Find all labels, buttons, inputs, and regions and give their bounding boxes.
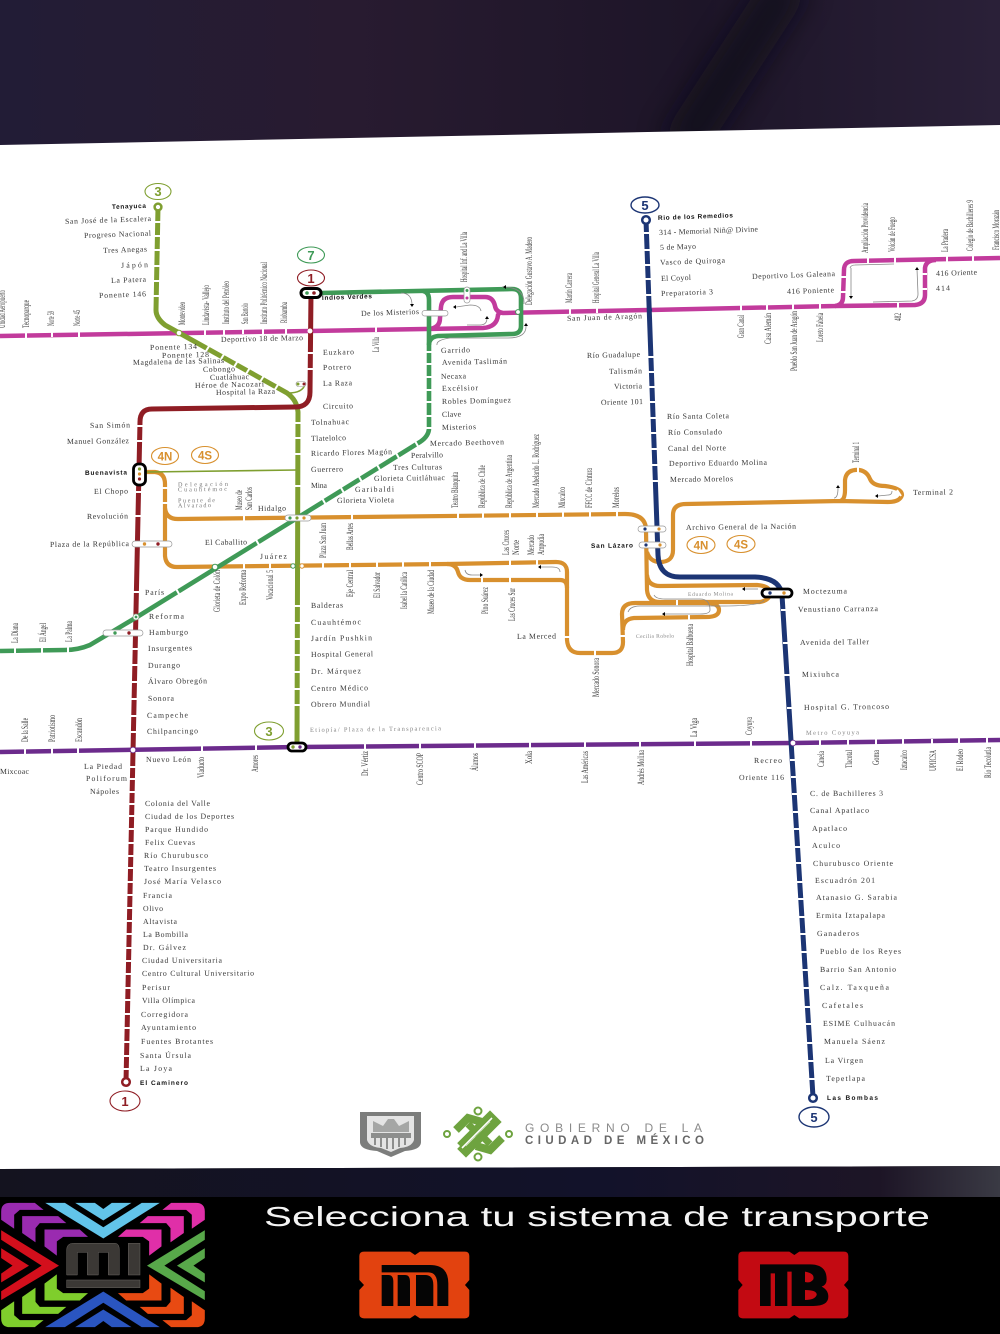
labels: line 1 north and line 3 center: Ricardo Flores Magón — [311, 447, 392, 458]
labels: line 1 north and line 3 center: Cuauhtémoc — [311, 617, 362, 627]
labels: line 1 north and line 3 center: Tlatelolco — [311, 433, 346, 443]
labels: vertical stations top: Pueblo San Juan de Aragón — [789, 311, 799, 371]
labels: line 1 north and line 3 center: Balderas — [311, 601, 343, 610]
badge: 4N right — [687, 536, 715, 554]
labels: line 4 horizontal: El Caballito — [205, 537, 247, 547]
line: red line 1 — [122, 293, 314, 1082]
labels: vertical stations line 4: Mercado — [526, 535, 536, 555]
labels: line 7: Glorieta Violeta — [337, 495, 395, 505]
labels: line 1 north and line 3 center: Tolnahuac — [311, 417, 350, 427]
labels: line 4 horizontal: Delegación — [178, 481, 228, 488]
labels: vertical stations top: Hospital Inf. and La Villa — [459, 232, 469, 282]
chevrons: orange bottom-right — [117, 1273, 205, 1328]
labels: line 1 north and line 3 center: Hospital General — [311, 649, 374, 659]
band: dark strip below map — [0, 1166, 1000, 1197]
labels: vertical stations line 4: Mercado Abelardo L. Rodríguez — [531, 434, 541, 508]
labels: line 5: Cafetales — [822, 1001, 863, 1010]
line: olive line 3 — [147, 207, 305, 747]
labels: vertical stations lines 7 and 2: La Diana — [10, 623, 20, 643]
labels: line 5: Avenida del Taller — [800, 637, 869, 647]
labels: vertical stations line 4: República de Chile — [477, 465, 487, 508]
labels: line 1 south: Río Churubusco — [144, 851, 208, 860]
labels: line 5: Barrio San Antonio — [820, 965, 896, 974]
panel: white map sheet — [0, 125, 1000, 1169]
labels: vertical stations lines 7 and 2: El Ángel — [38, 623, 48, 642]
labels: vertical stations line 4: Las Cruces — [501, 530, 511, 555]
labels: line 5: Rio de los Remedios — [658, 212, 733, 222]
line: purple line 2 — [0, 737, 1000, 755]
chevrons: blue bottom — [43, 1291, 162, 1328]
labels: line 5: Apatlaco — [812, 824, 847, 833]
labels: line 5: Río Guadalupe — [587, 350, 641, 360]
labels: vertical stations line 4: Hospital Balbuena — [685, 624, 695, 666]
interchange pills — [103, 287, 796, 753]
labels: vertical stations line 4: FFCC de Cintura — [584, 468, 594, 508]
labels: line 1 south: La Bombilla — [143, 930, 189, 939]
labels: line 6 horizontal: 416 Poniente — [787, 285, 835, 296]
labels: line 5: C. de Bachilleres 3 — [810, 789, 883, 798]
labels: line 4 horizontal: Alvarado — [178, 502, 211, 509]
labels: vertical stations lines 7 and 2: Andrés Molina — [636, 750, 646, 785]
labels: line 5: Oriente 116 — [739, 773, 784, 782]
labels: vertical stations top: La Pradera — [940, 229, 950, 252]
labels: vertical stations lines 7 and 2: Canela — [816, 751, 826, 767]
labels: line 1 center: Durango — [148, 661, 180, 670]
labels: vertical stations lines 7 and 2: Álamos — [470, 753, 480, 771]
icon: Ciudad de México green knot — [444, 1108, 512, 1160]
labels: vertical stations line 4: Mixcalco — [557, 487, 567, 508]
labels: line 3 north: Tenayuca — [112, 203, 146, 211]
labels: line 5: Oriente 101 — [601, 397, 643, 407]
labels: vertical stations top — [0, 200, 1000, 371]
badge: line 5 top — [631, 197, 659, 213]
labels: line 3 north: Ponente 146 — [99, 289, 146, 300]
line number badges — [110, 184, 829, 1127]
labels: vertical stations line 4: República de Argentina — [504, 455, 514, 508]
labels: line 4 horizontal: Juárez — [260, 552, 288, 561]
labels: vertical stations top: Volcán de Fuego — [887, 217, 897, 252]
labels: line 4 horizontal — [0, 481, 796, 776]
labels: line 3 north: Cobongo — [203, 364, 235, 374]
labels: line 1 north and line 3 center: Indios Verdes — [322, 293, 372, 302]
labels: line 5: Ganaderos — [817, 929, 859, 938]
labels: vertical stations top: Norte 45 — [72, 310, 82, 326]
labels: line 4 horizontal: Cuauhtémoc — [178, 486, 227, 493]
labels: line 5: Canal Apatlaco — [810, 806, 869, 815]
labels: vertical stations lines 7 and 2: UPIICSA — [928, 750, 938, 771]
labels: vertical stations lines 7 and 2: Xola — [524, 751, 534, 764]
labels: vertical stations line 4: Teatro Blanquita — [450, 472, 460, 508]
labels: line 4 horizontal: Mixcoac — [0, 767, 30, 776]
labels: line 5: Victoria — [614, 381, 643, 391]
labels: vertical stations lines 7 and 2: Escandón — [74, 718, 84, 742]
badge: line 3 bottom: 3 — [265, 724, 273, 739]
labels: line 1 north and line 3 center: Centro Médico — [311, 683, 368, 693]
labels: line 4 horizontal: La Merced — [517, 632, 556, 641]
line: orange lines 4N and 4S — [145, 467, 902, 656]
labels: line 5: Preparatoria 3 — [661, 287, 713, 298]
labels: line 1 south: Teatro Insurgentes — [144, 864, 216, 873]
labels: line 3 north: Tres Anegas — [103, 244, 147, 255]
labels: line 6 horizontal: 416 Oriente — [936, 268, 978, 278]
labels: line 4 horizontal: Eduardo Molina — [688, 591, 734, 598]
labels: line 4 horizontal: Hidalgo — [258, 504, 286, 513]
labels: vertical stations line 4: Norte — [511, 540, 521, 555]
badge: line 5 bottom: 5 — [810, 1110, 818, 1125]
labels: line 3 north — [65, 203, 276, 397]
labels: line 5: Mercado Morelos — [670, 474, 733, 484]
badge: line 3 top — [145, 184, 171, 200]
labels: line 3 north: Progreso Nacional — [84, 229, 152, 240]
labels: line 3 north: San José de la Escalera — [65, 214, 152, 226]
badge: line 3 top: 3 — [154, 184, 162, 199]
labels: vertical stations top: 482 — [893, 313, 903, 321]
labels: line 1 south: Francia — [143, 891, 173, 900]
labels: line 1 south: La Joya — [140, 1064, 173, 1073]
labels: line 4 horizontal: Cecilia Robelo — [636, 634, 674, 640]
labels: vertical stations line 4: Museo de — [234, 490, 244, 510]
labels: line 5: Manuela Sáenz — [824, 1037, 886, 1046]
labels: line 7: Necaxa — [441, 371, 467, 381]
labels: vertical stations line 4: Terminal 1 — [851, 442, 861, 463]
labels: line 1 north and line 3 center: Mina — [311, 481, 328, 490]
labels: vertical stations lines 7 and 2: Las Américas — [580, 751, 590, 783]
labels: line 6 horizontal: Terminal 2 — [913, 488, 953, 497]
labels: line 3 north: Magdalena de las Salinas — [133, 356, 224, 367]
labels: vertical stations line 4: Bellas Artes — [345, 523, 355, 550]
labels: line 6 horizontal: 414 — [936, 284, 950, 293]
labels: line 1 center: París — [145, 588, 164, 597]
labels: line 1 south: Dr. Gálvez — [143, 943, 187, 952]
labels: line 5: Churubusco Oriente — [813, 859, 894, 868]
labels: line 7: Avenida Taslimán — [442, 357, 507, 367]
labels: vertical stations line 4: Eje Central — [345, 570, 355, 597]
labels: line 5: Escuadrón 201 — [815, 876, 875, 885]
badge: 4N right: 4N — [694, 540, 708, 552]
direction arrows — [401, 264, 919, 616]
labels: vertical stations lines 7 and 2: Río Tecolutla — [983, 747, 993, 778]
badge: line 7 — [298, 247, 324, 263]
labels: line 1 south: Ciudad de los Deportes — [145, 812, 234, 821]
labels: line 5: Canal del Norte — [668, 443, 727, 453]
letter mark — [67, 1243, 140, 1288]
labels: vertical stations lines 7 and 2: Centro SCOP — [415, 753, 425, 785]
labels: vertical stations line 4: Isabel la Católica — [399, 572, 409, 609]
labels: line 7: De los Misterios — [361, 307, 419, 318]
labels: line 5: Río Consulado — [668, 427, 722, 437]
labels: line 5: Recreo — [754, 756, 782, 765]
labels: line 1 south: Parque Hundido — [145, 825, 208, 834]
labels: line 1 south: Perisur — [142, 983, 170, 992]
labels: line 6 horizontal — [752, 268, 978, 497]
labels: line 1 center: Sonora — [148, 694, 175, 703]
labels: line 3 north: Ponente 134 — [150, 342, 197, 352]
labels: line 5: 314 - Memorial Niñ@ Divine — [659, 225, 759, 237]
icon: app logo with coloured chevrons — [1, 1202, 205, 1328]
labels: line 5: El Coyol — [661, 273, 692, 283]
labels: vertical stations line 4: Museo de la Ciudad — [426, 570, 436, 614]
labels: line 1 north and line 3 center: Potrero — [323, 362, 351, 372]
badge: line 5 bottom — [799, 1107, 829, 1127]
labels: vertical stations lines 7 and 2: Viaducto — [196, 757, 206, 778]
labels: vertical stations top: Gran Canal — [736, 315, 746, 338]
labels: line 5: Hospital G. Troncoso — [804, 702, 889, 712]
labels: line 1 center: Álvaro Obregón — [148, 675, 207, 686]
labels: line 1 south: Corregidora — [141, 1010, 189, 1019]
labels: vertical stations top: Colegio de Bachilleres 9 — [965, 200, 975, 251]
line: navy line 5 — [642, 220, 815, 1097]
labels: line 1 south: Centro Cultural Universitario — [142, 969, 254, 978]
labels: line 5: 5 de Mayo — [660, 242, 696, 252]
chevrons: red left — [1, 1229, 60, 1301]
labels: vertical stations line 4: Vocacional 5 — [265, 570, 275, 600]
labels: vertical stations line 4: Morelos — [611, 487, 621, 508]
text: Gobierno de la Ciudad de México — [525, 1121, 704, 1147]
labels: line 7 — [337, 307, 512, 505]
labels: line 3 north: Cuatláhuac — [210, 372, 250, 382]
labels: vertical stations lines 7 and 2: Tlacotal — [844, 750, 854, 768]
labels: line 7: Mercado Beethoven — [430, 437, 504, 448]
labels: vertical stations top: Montevideo — [177, 302, 187, 325]
badge: line 7: 7 — [307, 248, 315, 263]
labels: line 1 center: La Piedad — [84, 762, 122, 771]
labels: line 1 center: Nápoles — [90, 787, 119, 796]
labels: line 1 south: Santa Úrsula — [140, 1050, 192, 1060]
text: Gobierno de la Ciudad de México: CIUDAD DE MÉXICO — [525, 1134, 704, 1147]
labels: vertical stations line 4: Mercado Sonora — [591, 658, 601, 697]
labels: line 1 north and line 3 center: Deportivo 18 de Marzo — [221, 333, 303, 344]
icon: Metro — [359, 1252, 469, 1318]
labels: vertical stations lines 7 and 2: Iztacalco — [899, 750, 909, 770]
labels: line 7: Glorieta Cuitláhuac — [374, 473, 446, 483]
labels: vertical stations line 4: Glorieta de Colón — [212, 570, 222, 612]
labels: line 3 north: Hospital la Raza — [216, 387, 276, 397]
labels: vertical stations lines 7 and 2: Dr. Vértiz — [360, 751, 370, 776]
labels: line 5: ESIME Culhuacán — [823, 1019, 895, 1028]
labels: line 1 north and line 3 center: Jardín Pushkin — [311, 633, 372, 643]
labels: line 7: Garibaldi — [355, 485, 395, 494]
badge: 4S left — [192, 446, 218, 464]
badge: line 1 top — [298, 270, 324, 286]
labels: line 5 — [567, 212, 901, 1102]
labels: line 1 north and line 3 center: Etiopía/ Plaza de la Transparencia — [310, 725, 441, 734]
icon: Metrobús — [738, 1252, 848, 1318]
icon: coat of arms shield — [360, 1112, 421, 1157]
labels: vertical stations lines 7 and 2: Patriotismo — [47, 715, 57, 742]
labels: line 1 north and line 3 center — [221, 293, 441, 734]
labels: line 1 center: Chilpancingo — [147, 726, 198, 736]
chevrons: light blue top — [43, 1202, 162, 1239]
labels: vertical stations lines 7 and 2: El Rodeo — [955, 749, 965, 771]
labels: line 7: Clave — [442, 410, 462, 419]
terminal rings — [122, 204, 817, 1102]
labels: vertical stations lines 7 and 2: Goma — [871, 750, 881, 765]
labels: line 5: Pueblo de los Reyes — [820, 947, 901, 956]
labels: line 1 center: Manuel González — [67, 436, 130, 446]
labels: line 1 north and line 3 center: Dr. Márquez — [311, 666, 362, 676]
labels: line 3 north: Héroe de Nacozari — [195, 379, 265, 390]
labels: line 3 north: Jápón — [121, 260, 148, 270]
labels: line 1 center: Nuevo León — [146, 755, 191, 764]
labels: line 4 horizontal: Puente de — [178, 497, 215, 504]
labels: line 5: Ermita Iztapalapa — [816, 911, 886, 920]
labels: line 1 south: Ciudad Universitaria — [142, 956, 223, 965]
labels: vertical stations line 4: San Carlos — [244, 487, 254, 510]
badge: 4S right — [727, 536, 755, 552]
chevrons: magenta top-right — [117, 1202, 205, 1257]
background: dark top texture — [0, 0, 1000, 150]
labels: line 1 center — [50, 421, 207, 796]
badge: 4N left — [152, 448, 178, 464]
labels: line 1 north and line 3 center: La Raza — [323, 378, 353, 388]
labels: vertical stations top: Lindavista- Vallejo — [201, 285, 211, 325]
labels: line 1 center: Plaza de la República — [50, 539, 130, 549]
labels: vertical stations line 4: Ampudia — [536, 534, 546, 555]
labels: vertical stations lines 7 and 2: Amores — [250, 755, 260, 772]
labels: vertical stations top: Martín Carrera — [564, 273, 574, 303]
labels: line 1 center: Buenavista — [85, 469, 127, 477]
labels: vertical stations top: Instituto Politécnico Nacional — [259, 262, 269, 324]
labels: vertical stations top: Riobamba — [279, 302, 289, 323]
labels: vertical stations line 4: Plaza San Juan — [318, 523, 328, 558]
labels: line 5: Venustiano Carranza — [798, 604, 879, 614]
labels: vertical stations top: Instituto del Petróleo — [221, 281, 231, 324]
labels: line 5: Metro Coyuya — [806, 729, 859, 737]
labels: line 1 center: Reforma — [149, 612, 185, 621]
labels: line 1 south: Fuentes Brotantes — [141, 1037, 213, 1046]
labels: line 7: Peralvillo — [411, 450, 443, 460]
metro map — [0, 184, 1000, 1127]
labels: line 5: Moctezuma — [803, 586, 848, 596]
labels: line 5: Calz. Taxqueña — [820, 983, 890, 992]
labels: vertical stations lines 7 and 2: Coyuya — [744, 717, 754, 735]
labels: line 1 south: Ayuntamiento — [141, 1023, 196, 1032]
labels: line 5: Río Santa Coleta — [667, 411, 730, 421]
labels: line 1 center: El Chopo — [94, 487, 128, 496]
labels: vertical stations line 4: Las Cruces Sur — [507, 588, 517, 621]
labels: vertical stations line 4 — [212, 434, 861, 697]
labels: line 5: La Virgen — [825, 1056, 863, 1065]
labels: line 1 south: Olivo — [143, 904, 163, 913]
labels: vertical stations lines 7 and 2: La Palma — [64, 621, 74, 642]
badge: line 1 bottom: 1 — [121, 1094, 129, 1109]
labels: line 1 south: José María Velasco — [144, 877, 221, 886]
labels: line 5: San Juan de Aragón — [567, 311, 642, 323]
labels: line 1 center: San Simón — [90, 421, 130, 430]
labels: line 1 south: Villa Olímpica — [142, 996, 196, 1005]
labels: line 1 south: El Caminero — [140, 1080, 188, 1087]
labels: line 7: Robles Domínguez — [442, 395, 512, 406]
labels: line 3 north: Ponente 128 — [162, 350, 209, 360]
panel: black footer bar — [0, 1197, 1000, 1334]
labels: line 1 center: Poliforum — [86, 774, 127, 783]
badge: line 1 top: 1 — [307, 271, 315, 286]
labels: line 5: Vasco de Quiroga — [660, 256, 726, 267]
labels: line 1 center: Revolución — [87, 511, 128, 521]
line: green line 7 — [0, 289, 521, 655]
labels: line 5: Deportivo Eduardo Molina — [669, 458, 768, 468]
labels: vertical stations top: Loreto Fabela — [815, 313, 825, 342]
line: pink line 6 — [0, 256, 1000, 338]
badge: line 5 top: 5 — [641, 198, 649, 213]
labels: line 5: Tepetlapa — [826, 1074, 866, 1083]
labels: line 7: Misterios — [442, 422, 476, 432]
labels: vertical stations lines 7 and 2: La Viga — [689, 718, 699, 737]
labels: line 1 center: Hamburgo — [149, 628, 188, 637]
chevrons: lime bottom-left — [1, 1273, 89, 1328]
labels: vertical stations top: Casa Alemán — [763, 313, 773, 344]
labels: line 1 north and line 3 center: Euzkaro — [323, 347, 354, 357]
labels: vertical stations lines 7 and 2 — [10, 621, 993, 785]
heading: select transport system: Selecciona tu sistema de transporte — [264, 1201, 930, 1232]
labels: vertical stations top: San Bartolo — [240, 303, 250, 324]
labels: vertical stations top: La Villa — [371, 337, 381, 352]
labels: line 5: Las Bombas — [827, 1095, 878, 1102]
badge: 4S right: 4S — [734, 540, 748, 552]
labels: line 1 south — [140, 799, 254, 1087]
badge: line 1 bottom — [110, 1091, 140, 1111]
labels: vertical stations top: Delegación Gustavo A. Madero — [524, 237, 534, 305]
labels: line 1 north and line 3 center: Circuito — [323, 401, 353, 411]
labels: vertical stations top: Ampliación Providencia — [860, 203, 870, 253]
labels: line 1 south: Colonia del Valle — [145, 799, 211, 808]
chevrons: green right — [146, 1229, 205, 1301]
badge: 4S left: 4S — [198, 450, 212, 462]
labels: line 1 north and line 3 center: Obrero Mundial — [311, 699, 371, 709]
labels: vertical stations top: Norte 59 — [46, 311, 56, 326]
labels: vertical stations line 4: Expo Reforma — [238, 570, 248, 605]
badge: 4N left: 4N — [158, 452, 172, 464]
labels: vertical stations top: Hospital General La Villa — [591, 252, 601, 303]
labels: line 5: Atanasio G. Sarabia — [816, 893, 898, 902]
labels: line 1 south: Altavista — [143, 917, 178, 926]
labels: line 3 north: La Patera — [111, 275, 147, 285]
labels: line 7: Excélsior — [442, 383, 478, 393]
labels: line 4 horizontal: San Lázaro — [591, 542, 633, 550]
labels: line 5: Mixiuhca — [802, 670, 840, 679]
labels: vertical stations top: Tecnoparque — [21, 300, 31, 328]
labels: line 1 south: Felix Cuevas — [145, 838, 195, 847]
labels: vertical stations lines 7 and 2: De la Salle — [20, 718, 30, 742]
labels: line 4 horizontal: Archivo General de la Nación — [686, 522, 796, 532]
labels: line 6 horizontal: Deportivo Los Galeana — [752, 269, 836, 281]
labels: line 1 center: Insurgentes — [148, 643, 192, 653]
labels: line 5: Talismán — [609, 366, 642, 376]
text: Gobierno de la Ciudad de México: GOBIERNO DE LA — [525, 1121, 702, 1135]
labels: line 7: Tres Culturas — [393, 462, 442, 472]
labels: line 1 north and line 3 center: Guerrero — [311, 465, 343, 474]
labels: line 7: Garrido — [441, 345, 470, 355]
labels: vertical stations line 4: El Salvador — [372, 572, 382, 598]
badge: line 3 bottom — [254, 722, 284, 740]
labels: line 1 center: Campeche — [147, 710, 189, 720]
labels: vertical stations line 4: Pino Suárez — [480, 587, 490, 614]
chevrons: purple top-left — [1, 1202, 89, 1257]
labels: line 5: Aculco — [812, 841, 840, 850]
